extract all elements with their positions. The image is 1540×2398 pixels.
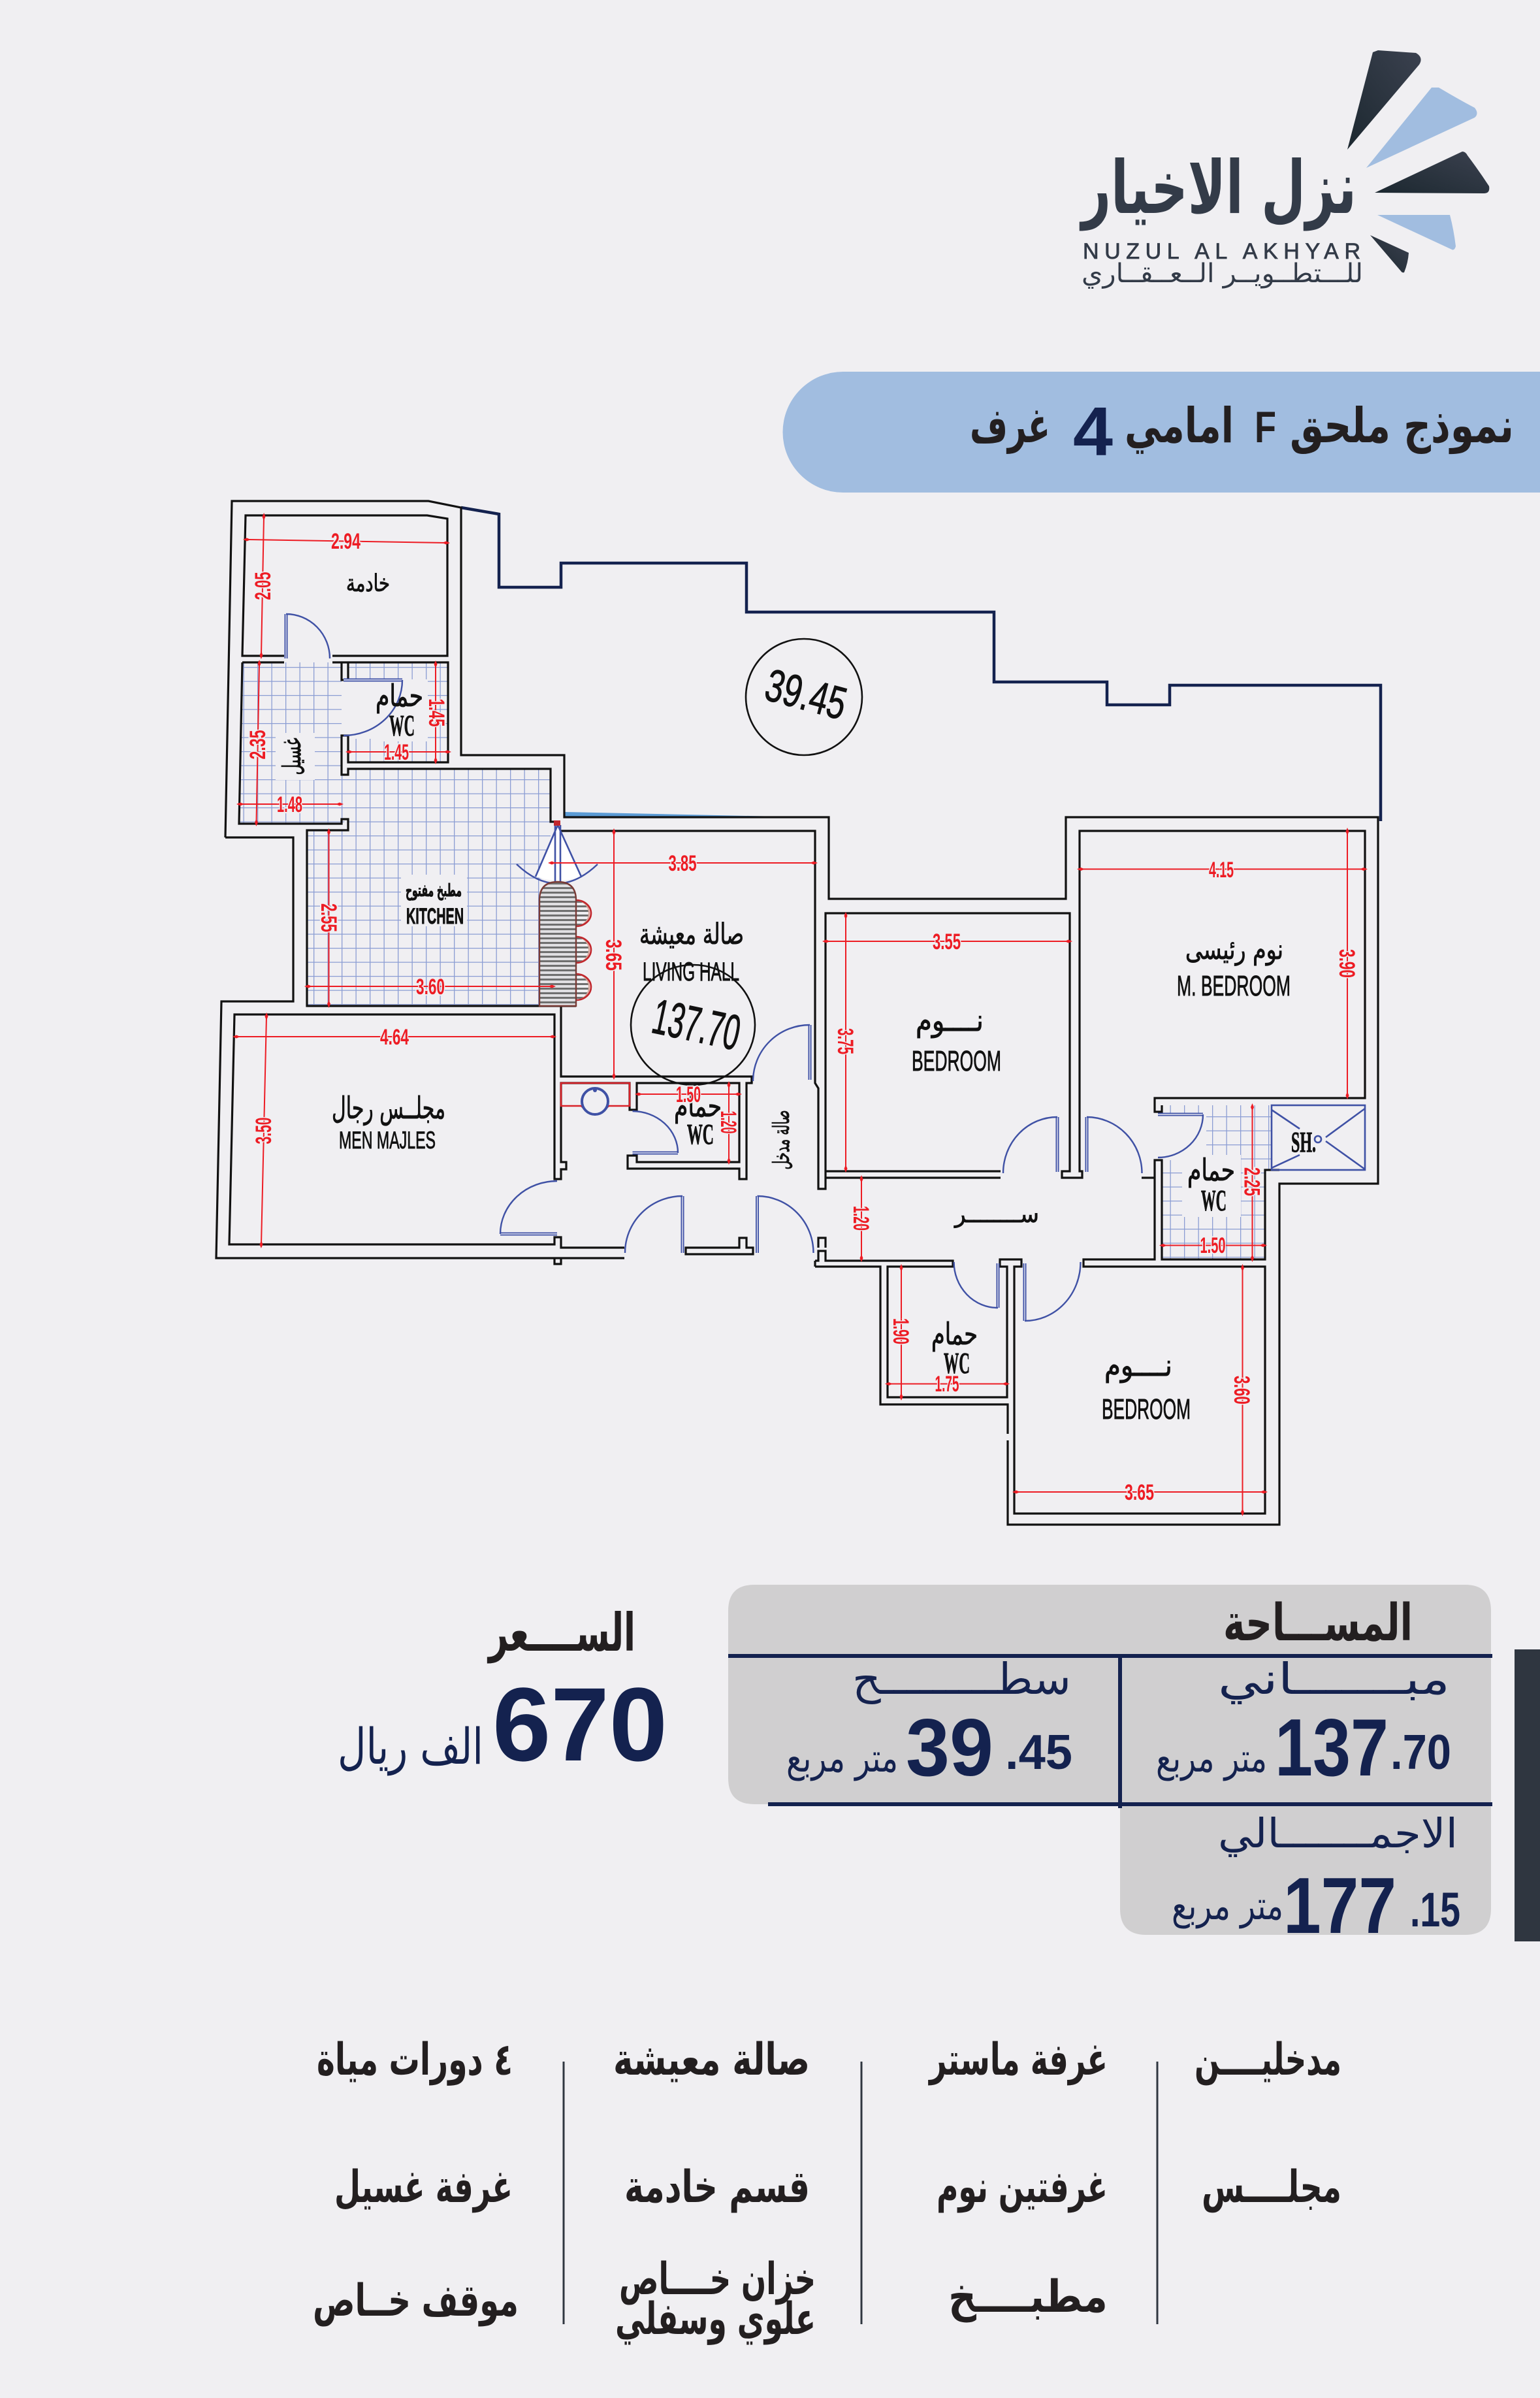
dimension values: 2.05 (251, 572, 276, 600)
roof area: متر مربع (786, 1736, 898, 1781)
dimension values: 1.45 (384, 740, 409, 765)
column 3: خزان خــــاص (619, 2254, 816, 2305)
dimension values: 3.65 (1125, 1480, 1154, 1505)
tile floors (239, 662, 1272, 1259)
dimension values: 1.20 (716, 1111, 741, 1133)
column 3: قسم خادمة (624, 2162, 810, 2213)
dimension values: 3.90 (1334, 949, 1359, 978)
label: men majles: مجلــس رجال (332, 1090, 445, 1126)
label: wc master: WC (1201, 1184, 1227, 1217)
column 2 (928, 2034, 1108, 2323)
dimension values: 3.60 (1229, 1376, 1254, 1404)
label: men majles: MEN MAJLES (339, 1127, 436, 1154)
label: entrance hall: صالة مدخل (769, 1110, 795, 1169)
logo (1080, 50, 1489, 289)
dimension values: 3.75 (833, 1028, 858, 1054)
dimension values: 1.45 (424, 699, 449, 726)
room labels (278, 570, 1316, 1425)
label: wc living: حمام (674, 1088, 722, 1124)
features list (313, 2034, 1341, 2345)
building area: مبـــــــاني (1218, 1654, 1450, 1704)
dimension lines (236, 517, 1364, 1512)
dimension values: 3.85 (669, 851, 696, 876)
label: wc lower (931, 1316, 978, 1380)
walls (216, 501, 1378, 1525)
logo english name: NUZUL AL AKHYAR (1083, 239, 1360, 264)
label: kitchen: مطبخ مفتوح (406, 881, 462, 901)
total area: 177 (1283, 1861, 1396, 1950)
label: bedroom 1: BEDROOM (912, 1045, 1001, 1077)
kitchen folding door (517, 820, 598, 883)
total area: متر مربع (1172, 1883, 1283, 1929)
price block (338, 1602, 667, 1783)
column 1: مدخليــــن (1195, 2034, 1341, 2086)
logo tagline: للـــتطــويــر الــعــقــاري (1082, 259, 1363, 289)
label: men majles (332, 1090, 445, 1154)
label: bedroom 1 (912, 1003, 1001, 1077)
label: wc living (674, 1088, 722, 1150)
dimension values: 4.15 (1209, 858, 1234, 883)
logo icon: rays (1347, 50, 1489, 272)
panel background (728, 1585, 1491, 1935)
label: wc upper (376, 678, 423, 742)
column 4 (313, 2034, 519, 2327)
label: shower: SH. (1291, 1126, 1316, 1158)
floor plan (216, 501, 1381, 1525)
label: wc upper: حمام (376, 678, 423, 713)
price heading: الســــعر (487, 1602, 635, 1664)
label: wc living: WC (687, 1118, 714, 1150)
label: kitchen: KITCHEN (406, 904, 464, 929)
dimension values (246, 529, 1359, 1505)
panel heading: المســـاحة (1223, 1594, 1413, 1653)
label: roof area: 39.45 (760, 659, 852, 730)
dimension values: 3.65 (601, 939, 626, 971)
label: corridor: ســــــــر (954, 1201, 1039, 1228)
vanity with sink (561, 1083, 630, 1114)
dimension values: 1.50 (1200, 1233, 1225, 1258)
roof area: 39 (906, 1703, 993, 1793)
banner title text (970, 393, 1514, 470)
label: building area: 137.70 (647, 988, 745, 1061)
dimension values: 4.64 (380, 1025, 409, 1050)
dimension values: 3.50 (251, 1117, 276, 1144)
price value: 670 (492, 1666, 667, 1783)
label: master bedroom: M. BEDROOM (1177, 970, 1291, 1002)
label: living hall (639, 918, 744, 986)
total area: الاجمـــــــالي (1218, 1809, 1458, 1857)
dimension values: 1.20 (848, 1206, 873, 1231)
building area: متر مربع (1156, 1736, 1267, 1781)
label: master bedroom: نوم رئيسى (1185, 933, 1283, 965)
shower (1272, 1105, 1365, 1170)
banner title text: F (1255, 402, 1276, 452)
column 4: موقف خــاص (313, 2275, 519, 2327)
title banner (783, 372, 1540, 493)
column 4: غرفة غسيل (334, 2162, 513, 2213)
label: wc master (1187, 1152, 1235, 1217)
breakfast counter with stools (539, 882, 591, 1006)
roof area: .45 (1005, 1725, 1072, 1779)
column 1: مجلــــس (1202, 2162, 1341, 2213)
roof area: سطـــــــــح (852, 1654, 1071, 1704)
label: wc lower: WC (944, 1346, 970, 1380)
dimension values: 2.35 (246, 730, 270, 759)
column 2: غرفة ماستر (928, 2034, 1108, 2086)
price unit: الف ريال (338, 1717, 483, 1776)
label: laundry: غسيل (278, 738, 306, 775)
total area (1172, 1809, 1460, 1950)
dimension values: 1.48 (277, 792, 302, 817)
banner title text: امامي (1125, 398, 1234, 454)
area panel (728, 1585, 1492, 1950)
label: wc lower: حمام (931, 1316, 978, 1352)
terrace outline (461, 508, 1381, 821)
building area: .70 (1390, 1725, 1451, 1779)
building area (1156, 1654, 1451, 1793)
dimension values: 1.75 (935, 1372, 959, 1397)
column 3: صالة معيشة (613, 2034, 810, 2086)
column 1 (1195, 2034, 1341, 2213)
dimension values: 3.55 (933, 930, 961, 954)
dimension values: 1.90 (888, 1318, 913, 1344)
column 3 (613, 2034, 816, 2345)
dimension values: 3.60 (416, 975, 445, 999)
dimension values: 2.55 (316, 903, 341, 932)
column 2: مطبــــخ (948, 2271, 1108, 2323)
label: wc upper: WC (389, 709, 415, 742)
dimension values: 1.50 (676, 1082, 701, 1107)
label: living hall: LIVING HALL (643, 958, 739, 986)
label: master bedroom (1177, 933, 1291, 1002)
building area: 137 (1275, 1703, 1388, 1793)
label: bedroom 1: نــــوم (916, 1003, 984, 1039)
column 2: غرفتين نوم (937, 2162, 1108, 2213)
area circles (631, 639, 862, 1085)
total area: .15 (1410, 1883, 1460, 1937)
label: bedroom 2 (1102, 1348, 1191, 1425)
column dividers (564, 2062, 1157, 2324)
logo arabic name: نزل الاخيار (1080, 146, 1356, 231)
column 4: ٤ دورات مياة (317, 2034, 513, 2086)
label: living hall: صالة معيشة (639, 918, 744, 951)
label: wc master: حمام (1187, 1152, 1235, 1188)
side bar (1515, 1649, 1540, 1941)
label: kitchen (406, 881, 464, 929)
banner title text: 4 (1073, 393, 1113, 470)
label: maid: خادمة (346, 570, 390, 597)
roof area (786, 1654, 1072, 1793)
banner title text: غرف (970, 398, 1050, 454)
dimension values: 2.94 (331, 529, 361, 554)
dimension values: 2.25 (1240, 1167, 1264, 1196)
panel lines (728, 1656, 1492, 1808)
column 3: علوي وسفلي (615, 2293, 816, 2345)
label: bedroom 2: BEDROOM (1102, 1393, 1191, 1425)
label: bedroom 2: نــــوم (1104, 1348, 1172, 1384)
doors (286, 614, 1203, 1321)
blue wedge (564, 812, 779, 817)
